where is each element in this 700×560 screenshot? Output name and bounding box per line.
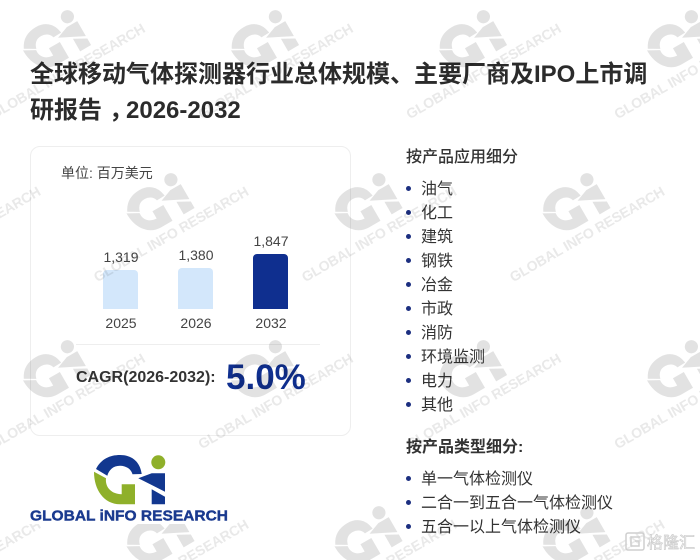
watermark pattern: GLOBAL INFO RESEARCH [91, 183, 251, 285]
list: applications: 钢铁 [421, 253, 453, 270]
icon: Gi mark [94, 455, 165, 504]
year label 2032: 2032 [255, 315, 287, 331]
watermark pattern: GLOBAL INFO RESEARCH [195, 350, 356, 452]
year label 2025: 2025 [105, 315, 137, 331]
list: applications: 消防 [421, 325, 453, 342]
watermark pattern: GLOBAL INFO RESEARCH [403, 20, 564, 122]
CAGR label: CAGR(2026-2032): [76, 369, 216, 386]
list: product types: 二合一到五合一气体检测仪 [421, 495, 613, 512]
list: applications: 建筑 [421, 229, 453, 246]
list: applications: 环境监测 [421, 349, 485, 366]
list: applications: 油气 [421, 181, 453, 198]
list: applications: 化工 [421, 205, 453, 222]
watermark pattern: GLOBAL INFO RESEARCH [299, 183, 459, 285]
icon: source badge [626, 533, 644, 550]
unit label: 单位: 百万美元 [61, 165, 153, 181]
list: product types: 单一气体检测仪 [421, 471, 533, 488]
list: applications: 市政 [421, 301, 453, 318]
title: 全球移动气体探测器行业总体规模、主要厂商及IPO上市调研报告 ，2026-2032 [30, 61, 647, 124]
value label 2025: 1,319 [103, 249, 139, 265]
list: applications: 其他 [421, 397, 453, 414]
value label 2026: 1,380 [178, 247, 214, 263]
list: applications: 电力 [421, 373, 453, 390]
source name: 格隆汇 [647, 534, 695, 552]
list: applications: 冶金 [421, 277, 453, 294]
watermark pattern: GLOBAL INFO RESEARCH [507, 183, 667, 285]
logo wordmark: GLOBAL iNFO RESEARCH [30, 508, 228, 524]
panel: market size card [30, 146, 351, 436]
heading: by application: 按产品应用细分 [406, 149, 518, 166]
year label 2026: 2026 [180, 315, 212, 331]
bar 2025 [103, 270, 138, 309]
list: applications [406, 180, 485, 414]
watermark pattern: GLOBAL INFO RESEARCH [403, 350, 564, 452]
list: product types: 五合一以上气体检测仪 [421, 519, 581, 536]
bar 2032 [253, 254, 288, 309]
watermark pattern: GLOBAL INFO RESEARCH [195, 20, 356, 122]
logo: Global Info Research [28, 450, 232, 524]
value label 2032: 1,847 [253, 233, 289, 249]
source watermark: 格隆汇 [625, 532, 695, 552]
heading: by type: 按产品类型细分: [406, 439, 523, 456]
bar 2026 [178, 268, 213, 309]
bar chart [103, 233, 289, 331]
CAGR value: 5.0% [226, 358, 306, 397]
